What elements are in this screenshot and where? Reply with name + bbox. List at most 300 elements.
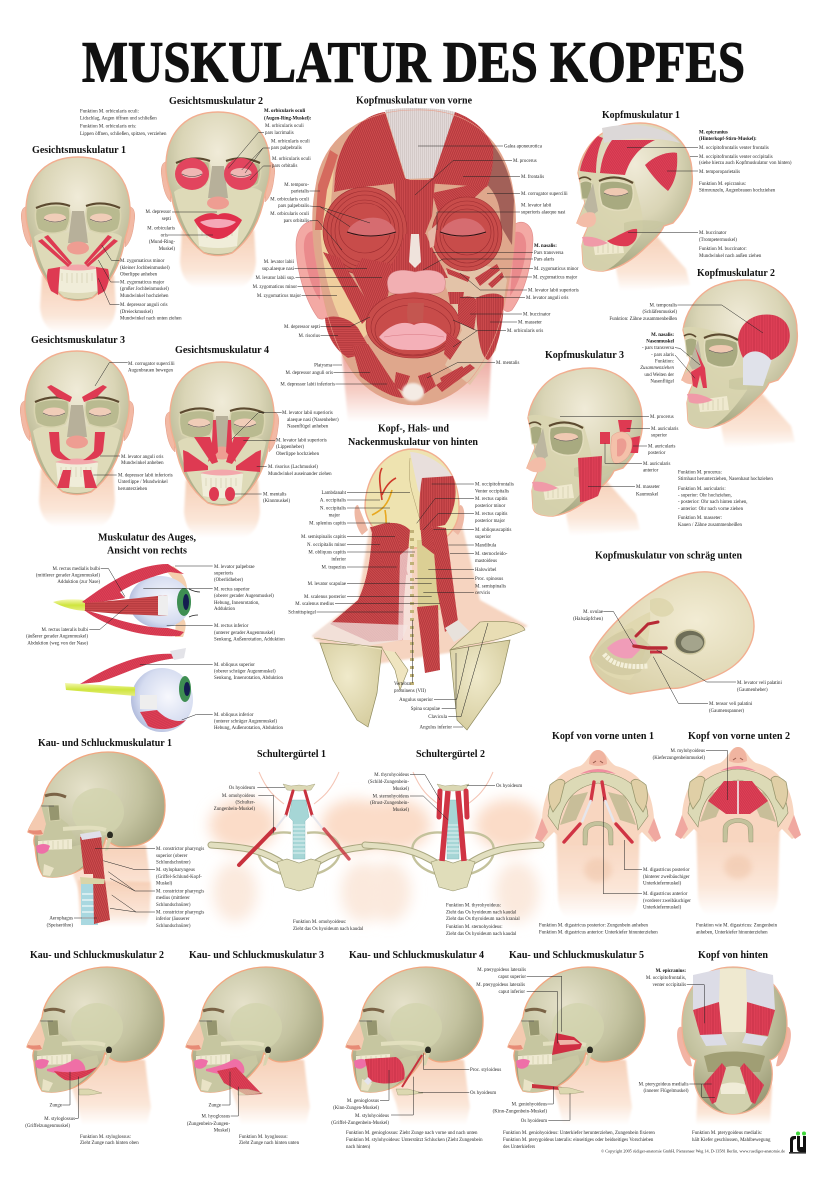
callout: obliquus capitis superior: superior xyxy=(475,535,491,540)
panel: Kau- und Schluckmuskulatur 1 xyxy=(28,737,204,929)
callout: pars lacrimalis: pars lacrimalis xyxy=(265,131,294,136)
callout: corrugator supercilii: Augenbrauen bewegen xyxy=(128,368,174,374)
callout: pars orbitalis xyxy=(250,157,311,180)
callout: levator veli palatini: (Gaumenheber) xyxy=(737,688,768,693)
label: orbicularis oculi heading: (Augen-Ring-Muskel): xyxy=(264,116,312,122)
heading: Gesichtsmuskulatur 4 xyxy=(175,344,270,356)
illustration: eye with oblique muscles xyxy=(65,648,193,732)
callout: constrictor superior: superior (oberer xyxy=(156,854,188,859)
callout: constrictor superior: Schlundschnürer) xyxy=(156,860,191,866)
text block: function digastricus xyxy=(539,924,658,936)
label: orbicularis oculi heading: M. orbicularis oculi xyxy=(264,109,306,114)
callout: digastricus posterior xyxy=(624,840,690,886)
callout: zygomaticus minor right: M. zygomaticus minor xyxy=(534,267,579,272)
callout: auricularis superior xyxy=(627,427,679,438)
illustration: three-quarter skull with ear and masseter xyxy=(527,368,642,536)
callout: semispinalis cervicis: cervicis xyxy=(475,591,490,596)
illustration: back of head, neck and shoulders xyxy=(312,449,528,730)
illustration: eye with rectus muscles xyxy=(53,564,200,637)
callout: pterygoideus medialis: (innerer Flügelmuskel) xyxy=(644,1089,689,1094)
heading: Nackenmuskulatur von hinten xyxy=(348,436,478,448)
text block: functions xyxy=(678,470,773,528)
callout: venter occipitalis xyxy=(690,155,792,166)
callout: nasalis: Nasenmuskel xyxy=(646,340,675,344)
callout: Zunge: Zunge xyxy=(208,1104,221,1108)
text block: function hyoglossus: Zieht Zunge nach hinten unten xyxy=(239,1141,300,1146)
callout: digastricus posterior: Unterkiefermuskel) xyxy=(643,882,682,886)
callout: constrictor medius: medius (mittlerer xyxy=(156,896,190,901)
callout: constrictor inferior xyxy=(110,895,204,929)
callout: nasalis: Pars alaris xyxy=(534,258,554,262)
callout: trapezius: M. trapezius xyxy=(322,566,346,570)
callout: Vertebra prominens: prominens (VII) xyxy=(394,689,426,694)
callout: risorius: M. risorius (Lachmuskel) xyxy=(268,465,318,470)
callout: buccinator: M. buccinator xyxy=(699,231,727,236)
callout: N. occipitalis minor: N. occipitalis minor xyxy=(307,543,346,548)
callout: depressor labii inferioris: M. depressor labii inferioris xyxy=(280,382,335,388)
callout: auricularis posterior: posterior xyxy=(648,451,666,456)
callout: corrugator supercilii xyxy=(95,362,175,386)
label: epicranius heading: M. epicranius xyxy=(699,130,728,136)
callout: genioglossus: M. genioglossus xyxy=(347,1099,379,1104)
panel: Gesichtsmuskulatur 1 xyxy=(21,109,182,333)
heading: Schultergürtel 1 xyxy=(257,748,326,760)
callout: sternohyoideus xyxy=(370,794,448,820)
callout: zygomaticus major left xyxy=(257,294,337,299)
callout: auricularis posterior xyxy=(633,444,676,456)
callout: genioglossus xyxy=(333,1070,389,1111)
callout: sternohyoideus: Muskel) xyxy=(393,808,409,813)
text block: function Orbicularis: Funktion M. orbicularis oris: xyxy=(80,124,137,130)
callout: temporalis: M. temporalis xyxy=(650,304,677,308)
callout: nasalis xyxy=(423,244,564,270)
callout: pars orbitalis: M. orbicularis oculi xyxy=(272,157,311,162)
callout: risorius xyxy=(257,465,332,477)
callout: genioglossus: (Kinn-Zungen-Muskel) xyxy=(333,1106,379,1111)
label: orbicularis oculi heading xyxy=(264,109,312,122)
callout: levator scapulae: M. levator scapulae xyxy=(308,582,346,587)
callout: pars lacrimalis: M. orbicularis oculi xyxy=(265,124,304,129)
callout: os hyoideum: Os hyoideum xyxy=(229,786,255,791)
panel: Kopf von hinten xyxy=(639,949,791,1143)
callout: rectus capitis posterior major: M. rectus capitis xyxy=(475,512,508,517)
callout: thyrohyoideus xyxy=(368,773,440,800)
text block: functions: Funktion M. sternohyoideus: xyxy=(446,925,503,930)
callout: levator labii superioris xyxy=(243,438,327,457)
callout: Spina scapulae xyxy=(411,653,456,712)
callout: zygomaticus major left: M. zygomaticus major xyxy=(257,294,301,299)
callout: auricularis superior: superior xyxy=(651,434,667,438)
heading: Kopfmuskulatur 3 xyxy=(545,349,625,361)
callout: depressor septi: M. depressor xyxy=(145,210,171,215)
callout: omohyoideus: (Schulter- xyxy=(236,800,255,806)
callout: platysma: Platysma xyxy=(314,364,333,368)
callout: obliquus superior xyxy=(140,663,284,681)
callout: Vertebra prominens: Vertebra xyxy=(394,682,411,687)
callout: obliquus capitis inferior: inferior xyxy=(331,558,346,562)
callout: rectus superior xyxy=(143,588,274,612)
callout: depressor labii inferioris: herunterziehen xyxy=(118,487,148,492)
icon: rüdiger logo xyxy=(789,1132,806,1154)
text block: function omohyoideus: Funktion M. omohyoideus: xyxy=(293,920,346,925)
callout: nasalis: Pars transversa xyxy=(534,251,564,256)
callout: pterygoideus lateralis caput superior: M. pterygoideus lateralis xyxy=(477,968,526,973)
callout: depressor labii inferioris: Unterlippe / Mundwinkel xyxy=(118,480,168,485)
panel: Gesichtsmuskulatur 4 xyxy=(165,344,339,538)
text block: function Orbicularis: Funktion M. orbicularis oculi: xyxy=(80,109,139,114)
heading: Gesichtsmuskulatur 2 xyxy=(169,95,263,107)
callout: zygomaticus minor left: M. zygomaticus minor xyxy=(253,285,297,290)
text block: function epicranius: Funktion M. epicranius: xyxy=(699,182,746,187)
callout: os hyoideum xyxy=(418,1091,496,1096)
callout: uvulae: (Halszäpfchen) xyxy=(573,617,603,622)
callout: risorius: Mundwinkel auseinander ziehen xyxy=(268,472,332,477)
callout: nasalis: - pars alaris xyxy=(651,353,674,358)
callout: levator palpebrae: superioris xyxy=(214,572,233,576)
callout: levator labii superioris alaeque nasi: alaeque nasi (Nasenheber) xyxy=(287,418,339,423)
callout: Zunge: Zunge xyxy=(50,1104,62,1108)
illustration: head with facial muscles xyxy=(296,108,533,422)
callout: obliquus capitis inferior xyxy=(308,550,415,562)
text block: function: anheben, Unterkiefer hinunterziehen xyxy=(696,930,768,936)
callout: zygomaticus major right: M. zygomaticus major xyxy=(533,276,578,280)
illustration: shoulder girdle with thyrohyoideus and sternohyoideus xyxy=(363,772,543,922)
callout: rectus lateralis: Abduktion (weg von der Nase) xyxy=(27,642,88,646)
callout: rectus medialis: M. rectus medialis bulbi xyxy=(52,567,101,572)
callout: nasalis: M. nasalis: xyxy=(651,333,674,338)
callout: auricularis anterior xyxy=(605,443,671,474)
callout: hyoglossus: Muskel) xyxy=(214,1128,230,1134)
callout: depressor septi: septi xyxy=(162,217,172,222)
callout: levator veli palatini xyxy=(657,650,782,693)
text block: functions: Zieht das Os thyroideum nach kranial xyxy=(446,917,520,922)
callout: scalenus posterior xyxy=(304,595,432,600)
panel: Kau- und Schluckmuskulatur 3 xyxy=(186,949,325,1146)
text block: function styloglossus xyxy=(80,1135,139,1146)
callout: rectus inferior: (unterer gerader Augenmuskel) xyxy=(214,631,275,636)
callout: levator veli palatini: M. levator veli palatini xyxy=(737,681,782,686)
callout: os hyoideum: Os hyoideum xyxy=(470,1091,496,1096)
callout: digastricus anterior xyxy=(603,797,691,910)
callout: Angulus superior: Angulus superior xyxy=(399,698,433,703)
callout: rectus superior: Adduktion xyxy=(214,607,235,612)
text block: functions: nach hinten) xyxy=(346,1145,371,1150)
heading: Kopf von vorne unten 2 xyxy=(688,730,790,742)
callout: occipitofrontalis: M. occipitofrontalis xyxy=(475,482,514,488)
heading: Kau- und Schluckmuskulatur 1 xyxy=(38,737,172,749)
callout: venter occipitalis: (siehe hierzu auch Kopfmuskulatur von hinten) xyxy=(699,161,792,166)
callout: pterygoideus medialis xyxy=(639,1082,715,1097)
callout: auricularis posterior: M. auricularis xyxy=(648,444,676,450)
callout: Lambdanaht xyxy=(322,491,410,496)
callout: levator labii superioris alaeque nasi: superioris alaeque nasi xyxy=(521,210,566,216)
callout: corrugator supercilii: M. corrugator supercilii xyxy=(128,362,175,367)
callout: depressor anguli oris: M. depressor anguli oris xyxy=(285,371,333,376)
callout: proc. styloideus: Proc. styloideus xyxy=(470,1068,501,1073)
callout: epicranius: M. occipitofrontalis, xyxy=(646,976,686,981)
callout: levator palpebrae: M. levator palpebrae xyxy=(214,565,255,570)
illustration: side head with pharynx xyxy=(28,752,165,927)
callout: thyrohyoideus: Muskel) xyxy=(393,787,409,792)
callout: semispinalis cervicis: M. semispinalis xyxy=(475,584,506,590)
callout: obliquus inferior: (unterer schräger Augenmuskel) xyxy=(214,720,277,724)
callout: procerus xyxy=(560,415,674,420)
illustration: three-quarter skull with epicranius xyxy=(577,123,692,291)
callout: constrictor inferior: Schlundschnürer) xyxy=(156,924,191,929)
callout: hyoglossus: (Zungenbein-Zungen- xyxy=(187,1122,230,1127)
callout: zygomaticus major: (großer Jochbeinmuskel) xyxy=(120,287,169,292)
callout: styloglossus xyxy=(25,1077,78,1129)
callout: zygomaticus major: Mundwinkel hochziehen xyxy=(120,294,169,299)
callout: semispinalis capitis xyxy=(301,535,395,540)
callout: levator labii superioris: Oberlippe hochziehen xyxy=(276,452,320,457)
illustration: skull from behind xyxy=(677,967,791,1125)
callout: constrictor superior: M. constrictor pharyngis xyxy=(156,847,204,852)
callout: risorius: M. risorius xyxy=(299,334,320,339)
callout: obliquus capitis inferior: M. obliquus capitis xyxy=(308,550,346,556)
panel: Kopf von vorne unten 2 xyxy=(653,730,801,936)
callout: obliquus superior: (oberer schräger Augenmuskel) xyxy=(214,670,276,674)
callout: nasalis xyxy=(640,333,700,384)
callout: mentalis xyxy=(427,361,519,378)
callout: stylohyoideus xyxy=(331,1077,413,1126)
callout: pars palpebralis xyxy=(270,198,370,227)
illustration: side head with pterygoideus xyxy=(508,967,645,1125)
callout: Lambdanaht: Lambdanaht xyxy=(322,491,347,496)
text block: function hyoglossus: Funktion M. hyoglossus: xyxy=(239,1135,288,1140)
callout: depressor septi xyxy=(145,210,217,222)
illustration: skull with zygomatic muscles xyxy=(21,157,135,333)
callout: geniohyoideus xyxy=(493,1087,553,1114)
callout: rectus superior: (oberer gerader Augenmuskel) xyxy=(214,594,274,599)
text block: functions: Zieht das Os hyoideum nach kaudal xyxy=(446,932,517,937)
callout: sternohyoideus: (Brust-Zungenbein- xyxy=(370,801,409,806)
label: epicranius heading xyxy=(699,130,757,142)
callout: obliquus superior: Senkung, Innenrotation, Abduktion xyxy=(214,676,284,681)
callout: rectus superior: M. rectus superior xyxy=(214,588,250,592)
callout: obliquus inferior: M. obliquus inferior xyxy=(214,713,254,718)
callout: zygomaticus minor right xyxy=(490,267,579,272)
illustration: head from below with digastricus xyxy=(535,750,661,918)
callout: Aerophagus: (Speiseröhre) xyxy=(47,924,73,928)
callout: levator labii sup. alaeque nasi: M. levator labii xyxy=(264,260,295,265)
callout: mentalis: (Kinnmuskel) xyxy=(263,499,291,504)
callout: buccinator xyxy=(628,231,737,243)
callout: levator anguli oris: Mundwinkel anheben xyxy=(121,461,164,466)
text block: functions xyxy=(446,904,520,937)
callout: buccinator xyxy=(470,312,551,318)
callout: orbicularis oris: (Mund-Ring- xyxy=(149,240,175,245)
callout: scalenus medius: M. scalenus medius xyxy=(295,602,334,607)
callout: masseter: M. masseter xyxy=(636,485,660,490)
text block: function styloglossus: Funktion M. styloglossus: xyxy=(80,1135,131,1140)
callout: masseter xyxy=(588,485,660,498)
callout: levator labii superioris: M. levator labii superioris xyxy=(276,438,327,444)
text block: function omohyoideus: Zieht das Os hyoideum nach kaudal xyxy=(293,927,364,932)
illustration: side head with genioglossus xyxy=(346,967,483,1125)
callout: omohyoideus: Zungenbein-Muskel) xyxy=(214,807,255,812)
callout: hyoglossus xyxy=(187,1087,238,1134)
callout: obliquus inferior: Hebung, Außenrotation, Abduktion xyxy=(214,726,284,731)
text block: function digastricus: Funktion M. digastricus posterior: Zungenbein anheben xyxy=(539,924,648,928)
callout: levator anguli oris xyxy=(100,455,164,466)
text block: function Orbicularis: Lippen öffnen, schließen, spitzen, verziehen xyxy=(80,132,167,137)
callout: rectus lateralis: (äußerer gerader Augenmuskel) xyxy=(26,634,88,640)
callout: temporoparietalis xyxy=(667,170,740,175)
heading: Muskulatur des Auges, xyxy=(98,532,196,544)
callout: rectus capitis posterior minor: posterior minor xyxy=(475,504,506,509)
callout: Mandibula: Mandibula xyxy=(475,544,497,548)
callout: orbicularis oris: Muskel) xyxy=(159,247,175,252)
callout: venter occipitalis: M. occipitofrontalis venter occipitalis xyxy=(699,155,773,160)
text block: function epicranius xyxy=(699,182,776,194)
callout: levator labii superioris alaeque nasi: M. levator labii superioris xyxy=(282,411,333,416)
text block: functions: Funktion M. procerus: xyxy=(678,470,722,476)
callout: orbicularis oris: M. orbicularis xyxy=(147,226,175,232)
text block: functions: Funktion M. geniohyoideus: Unterkiefer herunterziehen, Zungenbein fixieren xyxy=(503,1131,655,1136)
callout: mentalis: M. mentalis xyxy=(496,361,519,366)
text block: functions: Funktion M. auricularis: xyxy=(678,487,726,492)
callout: stylopharyngeus: Muskel) xyxy=(156,882,173,886)
heading: Gesichtsmuskulatur 3 xyxy=(31,334,126,346)
callout: Zunge xyxy=(208,1072,230,1108)
callout: rectus lateralis: M. rectus lateralis bulbi xyxy=(42,628,89,633)
callout: platysma xyxy=(314,364,342,368)
callout: depressor septi xyxy=(284,317,370,330)
callout: levator labii superioris alaeque nasi: Nasenflügel anheben xyxy=(287,424,329,430)
text block: functions: Stirnhaut herunterziehen, Nasenhaut hochziehen xyxy=(678,477,773,482)
callout: auricularis superior: M. auricularis xyxy=(651,427,679,432)
callout: os hyoideum xyxy=(229,786,285,791)
callout: stylopharyngeus: (Griffel-Schlund-Kopf- xyxy=(156,875,202,880)
callout: splenius capitis xyxy=(309,522,390,526)
panel: Gesichtsmuskulatur 2 xyxy=(145,95,312,288)
callout: constrictor superior xyxy=(95,847,204,866)
callout: sternocleidomastoideus: M. sternocleido- xyxy=(475,552,508,557)
callout: levator anguli oris xyxy=(460,296,568,301)
callout: stylohyoideus: (Griffel-Zungenbein-Muskel) xyxy=(331,1121,389,1126)
text block: functions: Funktion M. stylohyoideus: Unterstützt Schlucken (Zieht Zungenbein xyxy=(346,1138,483,1143)
text block: function pterygoideus medialis xyxy=(692,1131,771,1143)
callout: depressor anguli oris xyxy=(285,371,370,376)
callout: zygomaticus minor left xyxy=(253,285,358,290)
text block: functions: Zieht das Os hyoideum nach kaudal xyxy=(446,910,517,916)
callout: nasalis: Funktion: xyxy=(655,360,674,364)
callout: styloglossus: (Griffelzungenmuskel) xyxy=(25,1124,70,1129)
callout: levator labii superioris right xyxy=(460,273,579,294)
callout: os hyoideum xyxy=(521,1093,570,1124)
text block: function: Funktion wie M. digastricus: Zungenbein xyxy=(696,924,778,928)
callout: constrictor inferior: M. constrictor pharyngis xyxy=(156,910,204,916)
callout: Spina scapulae: Spina scapulae xyxy=(411,707,440,712)
callout: rectus inferior: M. rectus inferior xyxy=(214,624,249,629)
callout: Angulus inferior: Angulus inferior xyxy=(420,726,452,730)
callout: constrictor inferior: inferior (äusserer xyxy=(156,917,190,922)
callout: Schnittspiegel xyxy=(288,610,403,616)
callout: venter frontalis: M. occipitofrontalis venter frontalis xyxy=(699,146,769,151)
label group: left muscle labels xyxy=(288,491,440,616)
label: epicranius heading: (Hinterkopf-Stirn-Muskel): xyxy=(699,137,757,142)
callout: zygomaticus minor: (kleiner Jochbeinmuskel) xyxy=(120,266,170,271)
callout: nasalis: - pars transversa xyxy=(642,346,675,351)
callout: levator labii superioris right: M. levator labii superioris xyxy=(528,288,579,294)
callout: temporoparietalis: M. temporo- xyxy=(284,183,309,188)
callout: orbicularis oris xyxy=(453,320,543,347)
text block: function digastricus: Funktion M. digastricus anterior: Unterkiefer hinunterziehen xyxy=(539,930,658,936)
callout: depressor anguli oris xyxy=(98,278,182,322)
callout: digastricus anterior: Unterkiefermuskel) xyxy=(643,906,682,910)
illustration: head from below with mylohyoideus xyxy=(675,747,801,915)
callout: scalenus posterior: M. scalenus posterior xyxy=(304,595,346,600)
text block: function hyoglossus xyxy=(239,1135,300,1146)
callout: Clavicula xyxy=(428,623,488,720)
text block: functions: Funktion M. thyrohyoideus: xyxy=(446,904,501,908)
callout: epicranius: M. epicranius: xyxy=(656,969,686,974)
callout: rectus medialis: Adduktion (zur Nase) xyxy=(57,580,100,585)
callout: mylohyoideus xyxy=(653,749,727,800)
heading: Kau- und Schluckmuskulatur 2 xyxy=(30,949,164,961)
callout: levator labii superioris alaeque nasi: M. levator labii xyxy=(521,204,552,208)
callout: geniohyoideus: M. geniohyoideus xyxy=(512,1102,547,1108)
text block: functions: - superior: Ohr hochziehen, xyxy=(678,494,732,498)
callout: digastricus posterior: M. digastricus posterior xyxy=(643,868,690,873)
text block: function Orbicularis xyxy=(80,109,167,137)
panel: Kopfmuskulatur von vorne xyxy=(253,94,579,422)
callout: orbicularis oris: oris xyxy=(161,234,168,238)
callout: A. occipitalis: A. occipitalis xyxy=(320,498,346,504)
callout: constrictor medius xyxy=(108,872,204,908)
callout: pars orbitalis: M. orbicularis oculi xyxy=(270,212,310,217)
panel: Kau- und Schluckmuskulatur 5 xyxy=(476,949,655,1150)
callout: Vertebra prominens xyxy=(394,620,426,694)
callout: constrictor medius: M. constrictor pharyngis xyxy=(156,890,204,894)
callout: masseter xyxy=(490,320,542,326)
callout: mentalis xyxy=(235,492,291,504)
callout: pars palpebralis: M. orbicularis oculi xyxy=(271,140,310,144)
callout: temporoparietalis: M. temporoparietalis xyxy=(699,170,740,175)
text block: function pterygoideus medialis: Funktion M. pterygoideus medialis: xyxy=(692,1131,762,1136)
callout: stylopharyngeus: M. stylopharyngeus xyxy=(156,868,195,873)
panel: Kopfmuskulatur 1 xyxy=(577,109,792,291)
illustration: skull with orbicularis muscles xyxy=(161,112,275,288)
callout: depressor labii inferioris xyxy=(93,474,173,492)
heading: Kopfmuskulatur 2 xyxy=(697,267,775,279)
text block: functions: Funktion M. pterygoideus lateralis: einseitiges oder beidseitiges Vorschieben xyxy=(503,1138,654,1143)
callout: auricularis anterior: M. auricularis xyxy=(643,462,671,467)
callout: depressor anguli oris: Mundwinkel nach unten ziehen xyxy=(120,316,182,322)
callout: rectus superior: Hebung, Innenrotation, xyxy=(214,601,260,606)
text block: function buccinator xyxy=(699,247,762,259)
callout: levator labii sup xyxy=(255,276,382,281)
illustration: side head with styloglossus xyxy=(27,967,164,1125)
text block: function Orbicularis: Lidschlag, Augen öffnen und schließen xyxy=(80,116,157,122)
callout: tensor veli palatini xyxy=(653,657,753,714)
callout: levator labii superioris alaeque nasi xyxy=(437,204,566,230)
callout: levator labii superioris: (Lippenheber) xyxy=(276,445,304,450)
panel: Kopf-, Hals- und Nackenmuskulatur von hinten xyxy=(288,422,528,730)
callout: rectus capitis posterior major: posterior major xyxy=(475,519,505,524)
text block: function xyxy=(696,924,778,936)
callout: levator palpebrae: (Oberlidheber) xyxy=(214,578,243,583)
callout: omohyoideus: M. omohyoideus xyxy=(222,794,255,799)
callout: galea aponeurotica: Galea aponeurotica xyxy=(504,144,543,150)
callout: Aerophagus xyxy=(47,916,97,928)
callout: orbicularis oris xyxy=(147,226,213,252)
callout: pars palpebralis: pars palpebralis xyxy=(271,146,302,151)
panel: Kopfmuskulatur 3 xyxy=(527,349,773,536)
panel: Kau- und Schluckmuskulatur 2 xyxy=(25,949,164,1146)
callout: galea aponeurotica xyxy=(418,144,543,150)
